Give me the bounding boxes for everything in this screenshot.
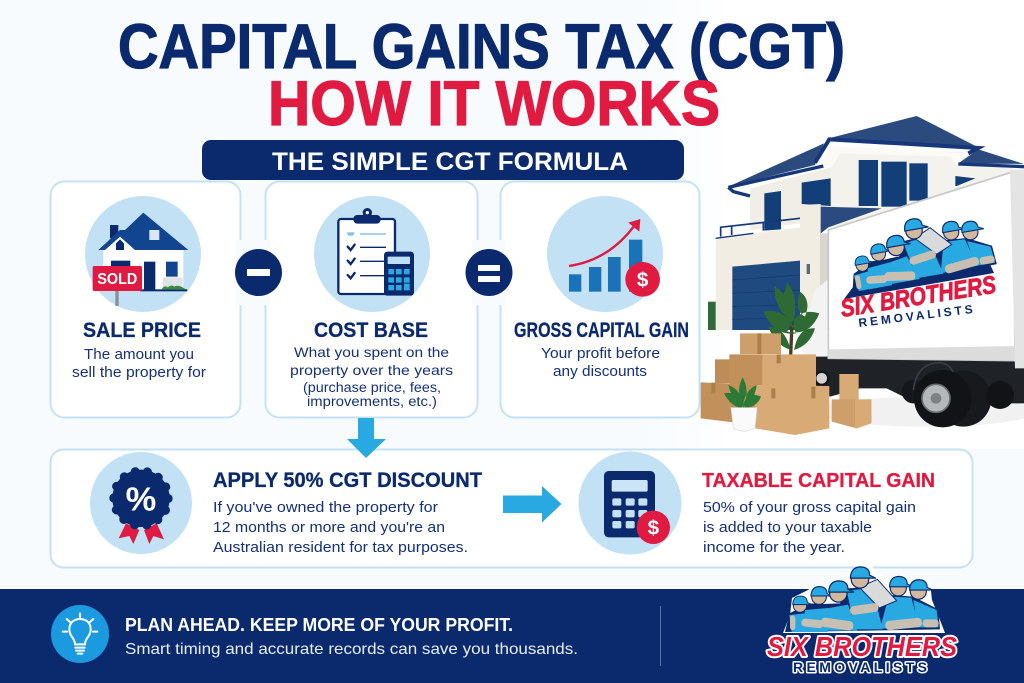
heading: cost base: COST BASE — [314, 319, 428, 342]
icon: growth chart: $ — [637, 269, 649, 292]
footer headline: PLAN AHEAD. KEEP MORE OF YOUR PROFIT. — [125, 615, 513, 635]
title: CAPITAL GAINS TAX (CGT) — [118, 12, 845, 82]
text: gross capital gain description — [541, 346, 660, 380]
icon: light bulb — [51, 605, 109, 663]
panel: sale price — [50, 182, 240, 418]
text: sale price description — [72, 347, 206, 381]
text: discount description: Australian resident for tax purposes. — [213, 539, 468, 556]
text: cost base description: (purchase price, fees, — [303, 380, 441, 395]
house — [708, 116, 1024, 330]
heading: sale price: SALE PRICE — [83, 319, 201, 342]
text: sale price description: The amount you — [84, 347, 194, 363]
icon: sold house: SOLD — [97, 271, 137, 288]
text: discount description: If you've owned the property for — [213, 499, 438, 516]
icon: growth chart — [547, 196, 663, 312]
heading: apply discount: APPLY 50% CGT DISCOUNT — [213, 469, 482, 492]
text: taxable gain description: income for the year. — [703, 539, 845, 556]
logo on truck: SIX BROTHERS — [839, 271, 998, 323]
text: taxable gain description — [703, 499, 916, 556]
formula heading bar — [202, 140, 684, 180]
text: cost base description: improvements, etc.) — [307, 394, 437, 409]
text: sale price description: sell the property for — [72, 365, 206, 381]
text: discount description — [213, 499, 468, 556]
formula heading bar: THE SIMPLE CGT FORMULA — [272, 148, 628, 176]
plant: tall — [763, 283, 819, 355]
icon: calculator: $ — [648, 517, 660, 540]
text: cost base description: What you spent on the — [294, 344, 449, 360]
title — [118, 12, 845, 139]
operator: minus — [235, 240, 282, 305]
illustration: house, truck and boxes — [701, 116, 1024, 435]
icon: discount badge: % — [126, 482, 156, 519]
footer logo: SIX BROTHERS — [767, 631, 957, 662]
logo on truck — [839, 206, 998, 330]
text: taxable gain description: is added to your taxable — [703, 519, 872, 536]
text: taxable gain description: 50% of your gross capital gain — [703, 499, 916, 516]
icon: clipboard and calculator — [314, 196, 430, 312]
arrow: right — [503, 486, 562, 522]
icon: calculator — [578, 452, 682, 554]
heading: gross capital gain: GROSS CAPITAL GAIN — [514, 319, 689, 342]
title: HOW IT WORKS — [268, 69, 720, 139]
footer logo — [767, 565, 957, 675]
panel: discount and taxable gain — [50, 450, 972, 568]
cardboard boxes — [701, 333, 871, 435]
truck — [800, 169, 1024, 427]
heading: taxable capital gain: TAXABLE CAPITAL GAIN — [702, 470, 935, 492]
text: gross capital gain description: Your profit before — [541, 346, 660, 362]
text: gross capital gain description: any discounts — [553, 364, 647, 380]
footer band — [0, 589, 1024, 683]
footer subtext: Smart timing and accurate records can save you thousands. — [125, 641, 578, 658]
text: discount description: 12 months or more and you're an — [213, 519, 445, 536]
text: cost base description: property over the years — [290, 362, 453, 378]
text: cost base description — [290, 344, 453, 409]
logo on truck: REMOVALISTS — [858, 302, 974, 330]
icon: discount badge — [90, 452, 192, 554]
potted plant — [724, 377, 761, 431]
panel: cost base — [266, 182, 478, 418]
footer logo: REMOVALISTS — [793, 659, 927, 675]
operator: equals — [466, 240, 512, 305]
panel: gross capital gain — [500, 182, 700, 418]
icon: sold house — [85, 196, 201, 312]
arrow: down — [347, 418, 386, 458]
